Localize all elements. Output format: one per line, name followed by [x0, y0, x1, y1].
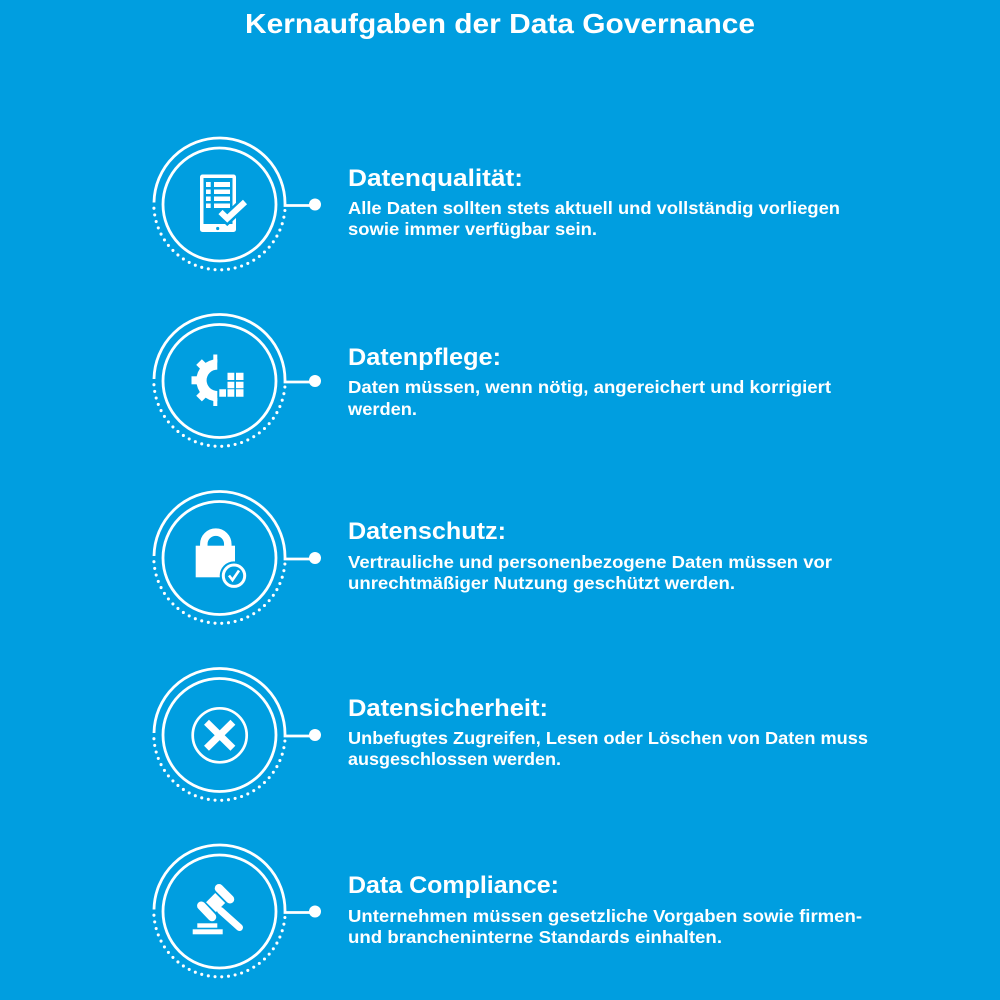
- heading: Datenschutz: Datenschutz:: [348, 518, 506, 545]
- ring emblem: Datenqualität: [154, 138, 321, 270]
- icon: half gear with data grid: [192, 354, 244, 406]
- heading: Datensicherheit: Datensicherheit:: [348, 695, 548, 722]
- body: Datensicherheit: ausgeschlossen werden.: [348, 749, 561, 769]
- body: Datenqualität: [348, 198, 840, 239]
- body: Datenqualität: sowie immer verfügbar sein.: [348, 219, 597, 239]
- heading: Data Compliance: Data Compliance:: [348, 872, 559, 899]
- icon: gavel: [193, 888, 240, 934]
- row 2: Datenpflege: [154, 314, 831, 446]
- row 4: Datensicherheit: [154, 668, 868, 800]
- body: Datenpflege: werden.: [347, 399, 417, 419]
- body: Datenpflege: [347, 377, 831, 419]
- title: Kernaufgaben der Data Governance: [245, 8, 755, 39]
- body: Datenqualität: Alle Daten sollten stets aktuell und vollständig vorliegen: [348, 198, 840, 218]
- body: Datensicherheit: [348, 728, 868, 769]
- icon: padlock with check badge: [196, 532, 248, 590]
- ring emblem: Datenschutz: [154, 491, 321, 623]
- body: Datenpflege: Daten müssen, wenn nötig, angereichert und korrigiert: [348, 377, 831, 397]
- body: Data Compliance: und brancheninterne Standards einhalten.: [348, 927, 722, 947]
- icon: crossed circle: [193, 708, 247, 762]
- body: Datenschutz: Vertrauliche und personenbezogene Daten müssen vor: [348, 552, 832, 572]
- body: Data Compliance: [348, 906, 862, 947]
- ring emblem: Datenpflege: [154, 314, 321, 446]
- row 3: Datenschutz: [154, 491, 832, 623]
- row 5: Data Compliance: [154, 845, 862, 977]
- body: Datensicherheit: Unbefugtes Zugreifen, Lesen oder Löschen von Daten muss: [348, 728, 868, 748]
- heading: Datenpflege: Datenpflege:: [348, 344, 501, 371]
- ring emblem: Data Compliance: [154, 845, 321, 977]
- row 1: Datenqualität: [154, 138, 840, 270]
- ring emblem: Datensicherheit: [154, 668, 321, 800]
- body: Datenschutz: [348, 552, 832, 593]
- body: Data Compliance: Unternehmen müssen gesetzliche Vorgaben sowie firmen-: [348, 906, 862, 926]
- heading: Datenqualität: Datenqualität:: [348, 165, 523, 192]
- body: Datenschutz: unrechtmäßiger Nutzung geschützt werden.: [348, 573, 735, 593]
- icon: tablet with checkmark: [200, 174, 245, 232]
